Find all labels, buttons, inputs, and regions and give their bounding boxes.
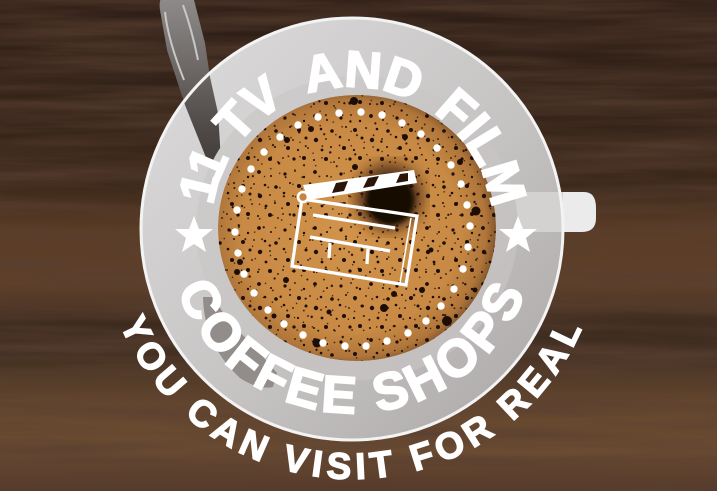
star left (175, 216, 213, 252)
large bubbles (234, 97, 480, 348)
dotted ring (231, 108, 474, 350)
spoon handle, upper (160, 0, 222, 175)
cup handle, outside the saucer (540, 192, 596, 232)
cup handle, seen through the saucer (515, 192, 563, 232)
heading: 11 TV and Film: 11 TV AND FILM (180, 50, 528, 206)
coffee surface (215, 90, 500, 365)
cup body (196, 76, 518, 380)
heading: Coffee Shops: COFFEE SHOPS (182, 280, 522, 415)
subheading: You can visit for real: YOU CAN VISIT FOR REAL (122, 312, 582, 480)
star right (499, 216, 537, 252)
saucer rim (141, 18, 563, 440)
saucer (141, 18, 563, 440)
foam bubbles (215, 90, 500, 365)
icon: film clapperboard (292, 170, 417, 285)
dark centre of the coffee (355, 163, 423, 231)
spoon bowl, lower (203, 297, 277, 388)
